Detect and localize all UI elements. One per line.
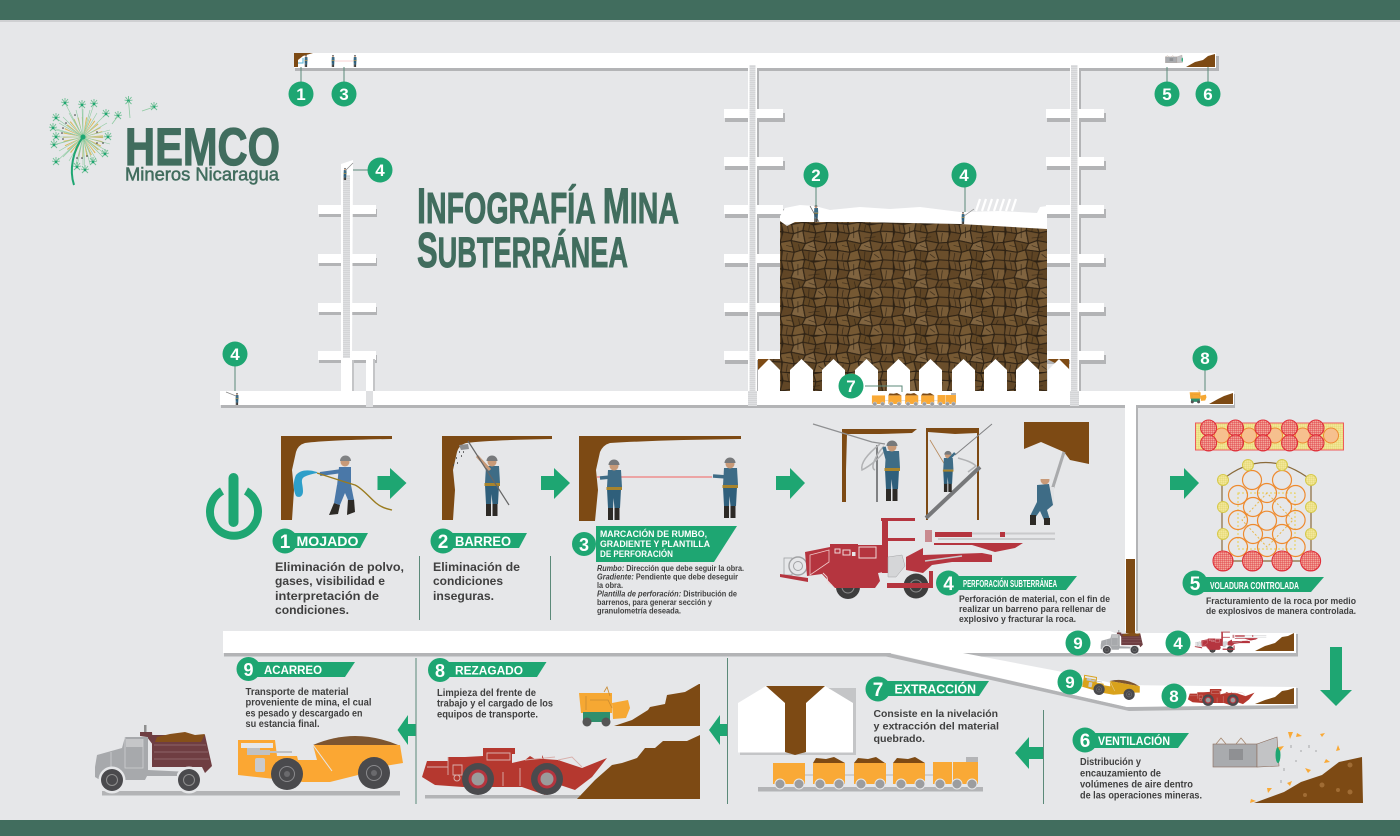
- marker 4 centre: 4: [959, 166, 969, 185]
- illustration: inclined drilling: [926, 424, 992, 520]
- step label: EXTRACCIÓN: [894, 682, 976, 696]
- marker 2: [804, 162, 828, 188]
- drill hole marks: [976, 199, 1016, 211]
- description: Gradiente: Pendiente que debe deseguir: [597, 572, 738, 582]
- panel: step 1 mojado: [272, 436, 404, 617]
- illustration: truck and dump vehicle: [95, 725, 403, 796]
- marker 7: 7: [846, 377, 856, 396]
- vertical ore pass: [1125, 405, 1138, 633]
- description: proveniente de mina, el cual: [246, 698, 372, 709]
- marker 4 right: [1166, 630, 1190, 656]
- panel: step 3 marcacion: [572, 436, 744, 616]
- arrow down: [1320, 647, 1352, 706]
- step label: REZAGADO: [455, 666, 523, 678]
- title: [417, 178, 679, 278]
- panel: step 8 rezagado: [422, 658, 700, 799]
- illustration: laser marking: [579, 436, 741, 521]
- title: SUBTERRÁNEA: [417, 224, 628, 278]
- description: quebrado.: [874, 733, 925, 745]
- description: Distribución y: [1080, 757, 1141, 768]
- top bar: [0, 0, 1400, 22]
- illustration: jumbo drill rig: [780, 518, 1055, 599]
- description: y extracción del material: [874, 720, 999, 732]
- description: Plantilla de perforación: Distribución de: [597, 590, 738, 598]
- marker 9 upper: 9: [1073, 634, 1083, 653]
- description: la obra.: [597, 581, 623, 590]
- illustration: ventilation fan and rock face: [1213, 732, 1363, 803]
- middle and inclined tunnels: [223, 631, 1298, 711]
- arrow: [776, 468, 805, 499]
- panel: step 4 perforacion: [780, 422, 1110, 625]
- marker 4 centre: [952, 162, 976, 188]
- description: volúmenes de aire dentro: [1080, 780, 1193, 790]
- description: [959, 594, 1110, 625]
- marker 5: 5: [1162, 85, 1172, 104]
- step label: 2: [438, 532, 448, 553]
- miniature: orange loader: [1190, 390, 1206, 403]
- marker 8 lower: 8: [1169, 687, 1179, 706]
- miniature: barring worker: [810, 205, 819, 222]
- description: Limpieza del frente de: [437, 688, 536, 699]
- step label: [572, 526, 737, 562]
- step label: [936, 570, 1077, 596]
- illustration: horizontal drilling: [813, 424, 917, 502]
- step label: [1072, 728, 1189, 752]
- panel: step 6 ventilacion: [1072, 728, 1363, 803]
- description: [246, 687, 372, 730]
- top tunnel: [294, 53, 1219, 71]
- tagline: Mineros Nicaragua: [125, 164, 280, 184]
- description: [433, 560, 520, 603]
- step label: VENTILACIÓN: [1098, 735, 1170, 748]
- diagram: blast plan: [1196, 420, 1344, 451]
- step label: DE PERFORACIÓN: [600, 548, 673, 559]
- description: barrenos, para generar sección y: [597, 598, 712, 607]
- marker 4 left shaft: 4: [375, 161, 385, 180]
- arrow: [1170, 468, 1199, 499]
- marker 8 upper: 8: [1200, 349, 1210, 368]
- description: granulometría deseada.: [597, 606, 681, 616]
- miniature: truck: [1101, 630, 1143, 655]
- wordmark: HEMCO: [125, 118, 280, 177]
- step label: 7: [873, 680, 883, 701]
- panel: step 5 voladura: [1182, 420, 1356, 617]
- bubble leader lines: [235, 67, 1208, 392]
- icon: dandelion: [49, 96, 158, 185]
- step label: ACARREO: [264, 665, 322, 677]
- mine cross-section diagram: [220, 53, 1298, 711]
- description: encauzamiento de: [1080, 768, 1161, 780]
- diagram: blast section: [1213, 460, 1321, 571]
- description: su estancia final.: [246, 719, 320, 730]
- description: Perforación de material, con el fin de: [959, 594, 1110, 605]
- description: [874, 708, 999, 745]
- step label: [236, 657, 355, 681]
- step label: [428, 658, 546, 682]
- description: [597, 564, 744, 616]
- description: Eliminación de polvo,: [275, 560, 404, 574]
- miniature: yellow dump: [1081, 673, 1141, 702]
- step label: 6: [1080, 731, 1090, 752]
- marker 9 upper: [1066, 630, 1090, 656]
- illustration: overhead drilling: [1024, 422, 1089, 525]
- description: [1080, 757, 1202, 802]
- shafts and ledges, left central: [724, 65, 785, 406]
- marker 1: 1: [296, 85, 306, 104]
- step label: VOLADURA CONTROLADA: [1210, 581, 1299, 592]
- step label: PERFORACIÓN SUBTERRÁNEA: [963, 577, 1057, 590]
- step label: [866, 676, 989, 702]
- bottom bar: [0, 820, 1400, 836]
- miniature: fan: [1165, 55, 1183, 63]
- description: explosivo y fracturar la roca.: [959, 614, 1076, 625]
- description: Transporte de material: [246, 687, 349, 698]
- step label: GRADIENTE Y PLANTILLA: [600, 539, 710, 549]
- marker 4 left shaft: [368, 158, 392, 182]
- step label: BARREO: [455, 534, 511, 549]
- icon: start power button: [210, 473, 258, 536]
- lower main tunnel: [220, 391, 1235, 408]
- arrow: [378, 468, 406, 499]
- description: [437, 688, 553, 720]
- step label: 8: [435, 661, 445, 681]
- arrow left: [398, 715, 416, 745]
- miniature: wetting front: [294, 53, 313, 67]
- panel: step 2 barreo: [430, 436, 552, 603]
- description: condiciones.: [275, 603, 349, 617]
- step label: 5: [1190, 574, 1201, 595]
- marker 8 lower: [1162, 684, 1186, 708]
- description: condiciones: [433, 574, 503, 588]
- illustration: wetting the rock: [281, 436, 392, 520]
- arrow: [541, 468, 570, 499]
- description: [1206, 596, 1356, 617]
- miniature: drilling worker left: [226, 392, 239, 405]
- miniature: train: [872, 393, 956, 406]
- description: Eliminación de: [433, 560, 520, 574]
- miniature: drilling worker centre: [962, 209, 974, 224]
- illustration: ore train: [758, 757, 983, 792]
- marker 6: 6: [1203, 85, 1213, 104]
- description: Fracturamiento de la roca por medio: [1206, 596, 1356, 607]
- marker 5: [1154, 82, 1180, 106]
- arrow left: [709, 715, 728, 745]
- step label: [430, 528, 527, 554]
- marker 2: 2: [811, 166, 821, 185]
- tunnel slopes: [1186, 54, 1294, 704]
- shaft and ledges, left: [318, 160, 377, 406]
- marker 9 lower: [1058, 670, 1082, 694]
- marker 3: 3: [339, 85, 349, 104]
- shafts and ledges, right central: [1046, 65, 1106, 406]
- step label: 4: [943, 574, 954, 595]
- step label: [272, 528, 368, 554]
- step label: MOJADO: [296, 534, 358, 549]
- marker 3: [332, 82, 356, 106]
- description: de las operaciones mineras.: [1080, 790, 1202, 802]
- marker 1: [288, 82, 314, 106]
- step label: 1: [280, 532, 291, 553]
- step label: 3: [579, 535, 589, 555]
- description: Rumbo: Dirección que debe seguir la obra.: [597, 564, 744, 573]
- illustration: draw point: [738, 686, 856, 755]
- title: INFOGRAFÍA MINA: [417, 178, 679, 234]
- miniature: jumbo: [1195, 632, 1266, 653]
- description: de explosivos de manera controlada.: [1206, 606, 1356, 617]
- miniature: worker on left shaft: [344, 163, 353, 180]
- rock ore body: [758, 205, 1070, 391]
- description: interpretación de: [275, 589, 379, 603]
- step label: MARCACIÓN DE RUMBO,: [600, 528, 707, 539]
- description: gases, visibilidad e: [275, 574, 385, 588]
- description: trabajo y el cargado de los: [437, 698, 553, 710]
- logo: HEMCO: [49, 96, 280, 185]
- description: [275, 560, 404, 617]
- illustration: loaders and muck piles: [422, 684, 700, 799]
- description: equipos de transporte.: [437, 710, 538, 720]
- marker 9 lower: 9: [1065, 673, 1075, 692]
- marker 8 upper: [1192, 346, 1218, 370]
- marker 6: [1196, 82, 1220, 106]
- description: es pesado y descargado en: [246, 708, 362, 719]
- description: inseguras.: [433, 589, 494, 603]
- step label: 9: [243, 660, 254, 680]
- marker 4 right: 4: [1173, 634, 1183, 653]
- arrow left: [1015, 737, 1043, 769]
- description: realizar un barreno para rellenar de: [959, 604, 1106, 615]
- marker 7: [838, 374, 864, 398]
- panel: step 7 extraccion: [738, 676, 999, 792]
- miniature: red loader: [1188, 689, 1255, 706]
- step label: [1182, 570, 1324, 596]
- description: Consiste en la nivelación: [874, 708, 998, 720]
- marker 4 lower left: 4: [230, 345, 240, 364]
- miniature: marking workers: [332, 55, 357, 67]
- marker 4 lower left: [222, 342, 248, 366]
- panel: step 9 acarreo: [95, 657, 403, 796]
- illustration: scaling the roof: [442, 436, 552, 520]
